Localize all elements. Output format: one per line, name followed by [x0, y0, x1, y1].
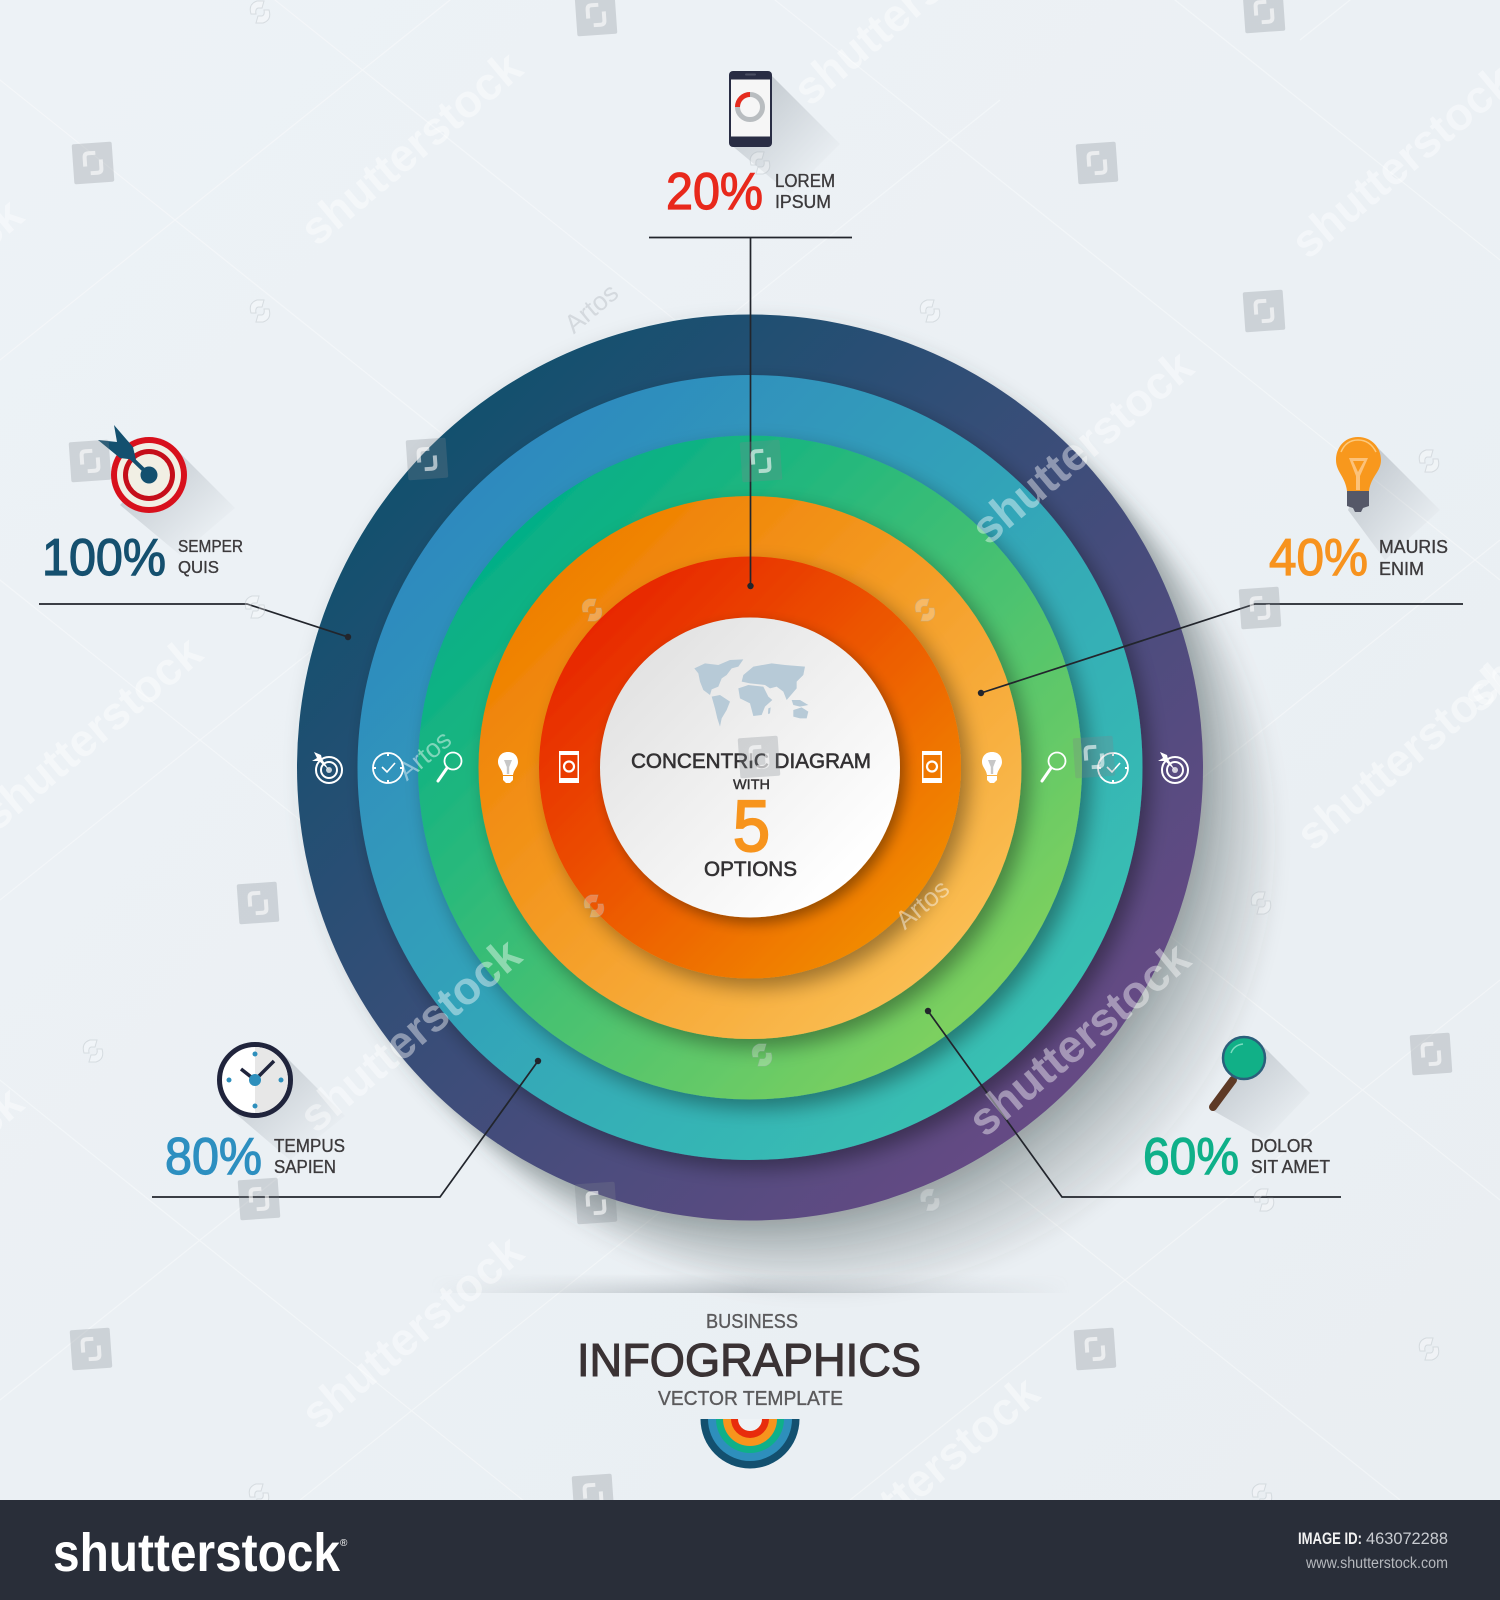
icon: smartphone — [729, 71, 840, 194]
value 40%: 40% — [1269, 529, 1368, 587]
website url: www.shutterstock.com — [1305, 1555, 1448, 1572]
watermarks: shutterstock — [289, 927, 531, 1142]
center diagram title: 5 — [733, 787, 770, 867]
icon: light bulb — [1336, 437, 1440, 560]
leader line — [152, 1061, 538, 1197]
watermarks: Artos — [391, 724, 457, 786]
value 60%: 60% — [1143, 1128, 1239, 1186]
watermarks: shutterstock — [961, 339, 1203, 554]
icon: bulb left — [498, 752, 518, 783]
watermarks: Artos — [889, 873, 955, 935]
ring 4: 40% — [478, 496, 1022, 1039]
callout: 80% tempus sapien — [152, 1044, 541, 1197]
leader line — [39, 604, 348, 637]
callout: 100% semper quis — [39, 425, 351, 640]
footer title block — [577, 1311, 921, 1410]
icon: target left — [312, 752, 342, 783]
icon: world map — [694, 659, 808, 727]
leader line — [928, 1011, 1341, 1197]
icon: clock left — [373, 753, 403, 783]
leader line — [981, 604, 1463, 693]
center diagram title: OPTIONS — [704, 858, 797, 881]
label lorem ipsum: LOREM — [775, 171, 835, 191]
callout: 20% lorem ipsum — [649, 71, 852, 589]
leader line — [649, 238, 852, 586]
icon: magnifier left — [438, 752, 462, 781]
icon: magnifier right — [1042, 752, 1066, 781]
ring 1: 100% outer — [297, 314, 1203, 1220]
watermarks: shutterstock — [807, 1365, 1049, 1580]
callout: 40% mauris enim — [978, 437, 1463, 696]
value 80%: 80% — [165, 1128, 262, 1186]
callout: 60% dolor sit amet — [925, 1008, 1341, 1197]
white ring icons, right side — [922, 751, 1188, 783]
white ring icons, left side — [312, 751, 579, 783]
concentric diagram rings — [297, 314, 1203, 1220]
icon: bulb right — [982, 752, 1002, 783]
icon: phone right — [922, 751, 942, 783]
center diagram title: WITH — [733, 777, 770, 792]
icon: magnifier — [1212, 1037, 1310, 1140]
label mauris enim: MAURIS — [1379, 537, 1448, 557]
label semper quis: QUIS — [178, 557, 219, 577]
label tempus sapien: SAPIEN — [274, 1157, 336, 1177]
icon: target right — [1158, 752, 1188, 783]
value 100%: 100% — [42, 529, 166, 587]
label dolor sit amet: DOLOR — [1251, 1136, 1313, 1156]
label tempus sapien: TEMPUS — [274, 1136, 345, 1156]
heading vector template: VECTOR TEMPLATE — [658, 1388, 843, 1410]
value 20%: 20% — [666, 163, 763, 221]
icon: dartboard — [98, 425, 235, 555]
label mauris enim: ENIM — [1379, 559, 1424, 579]
image id: IMAGE ID: — [1298, 1530, 1362, 1548]
watermarks: shutterstock — [958, 931, 1200, 1146]
label semper quis: SEMPER — [178, 536, 243, 556]
watermarks: shutterstock — [290, 40, 532, 255]
label dolor sit amet: SIT AMET — [1251, 1157, 1330, 1177]
label lorem ipsum: IPSUM — [775, 192, 831, 212]
icon: clock — [220, 1044, 345, 1160]
heading business: BUSINESS — [706, 1311, 798, 1333]
icon: clock right — [1098, 753, 1128, 783]
center disc — [600, 618, 900, 918]
main circle long diagonal shadow — [300, 318, 1274, 1292]
icon: small semicircle logo — [700, 1419, 800, 1468]
registered mark: ® — [340, 1538, 348, 1549]
center diagram title — [631, 750, 871, 881]
ring 3: 60% — [418, 436, 1082, 1100]
bottom brand bar — [0, 1500, 1500, 1600]
image number: 463072288 — [1366, 1530, 1448, 1548]
icon: phone left — [559, 751, 579, 783]
ring 2: 80% — [358, 375, 1142, 1160]
watermarks: Artos — [558, 277, 624, 339]
floor shadow — [482, 1278, 1014, 1293]
watermarks: shutterstock — [291, 1224, 533, 1439]
heading infographics: INFOGRAPHICS — [577, 1334, 921, 1386]
ring 5: 20% — [539, 556, 961, 978]
center diagram title: CONCENTRIC DIAGRAM — [631, 750, 871, 773]
shutterstock logo: shutterstock — [53, 1523, 341, 1583]
